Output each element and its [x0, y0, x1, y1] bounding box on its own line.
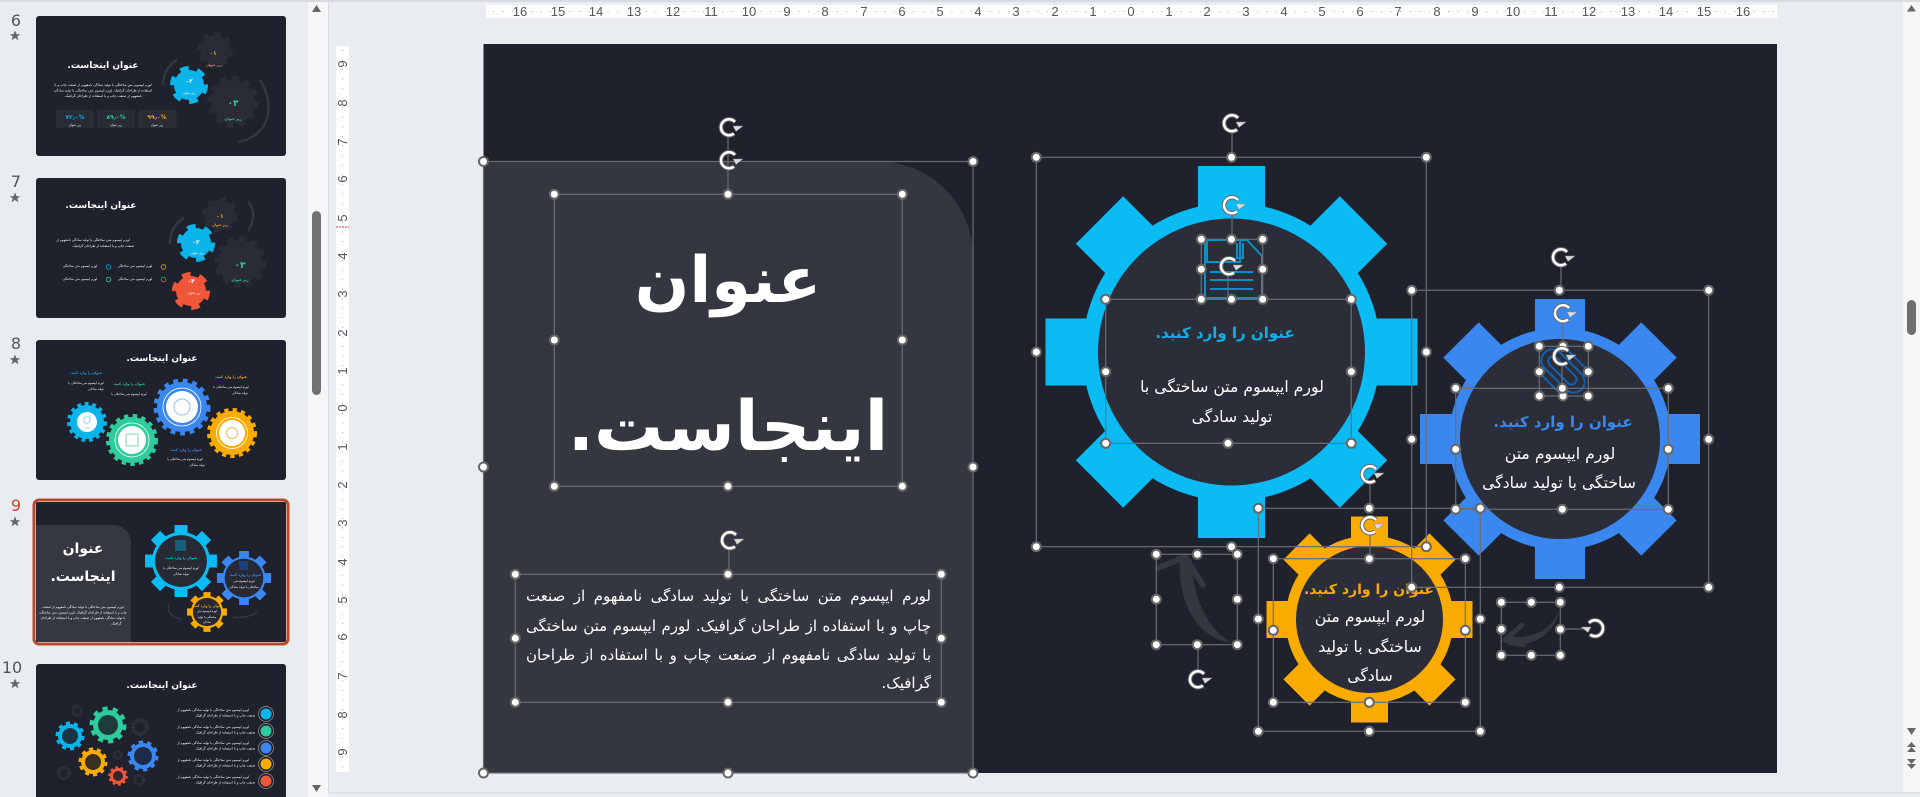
horizontal ruler: 16 [513, 4, 527, 19]
main scrollbar [1903, 2, 1920, 792]
thumbnail: slide 10: صنعت چاپ و با استفاده از طراحان گرافیک. [195, 780, 255, 784]
thumbnail: slide 8: لورم ایپسوم متن ساختگی با [167, 457, 203, 462]
thumbnail: slide 6: عنوان اینجاست. [67, 61, 139, 71]
thumbnail: slide 8: عنوان را وارد کنید. [215, 375, 248, 379]
thumbnail: slide 7: صنعت چاپ و با استفاده از طراحان گرافیک. [72, 243, 134, 248]
selection handles [479, 153, 1713, 778]
horizontal ruler: 6 [1356, 4, 1364, 19]
thumbnail: slide 10: صنعت چاپ و با استفاده از طراحان گرافیک. [195, 730, 255, 734]
thumbnail: slide 9, selected: لورم ایپسوم متن [233, 579, 255, 584]
thumbnail: slide 7: ۰۲ [192, 239, 200, 246]
body paragraph [526, 587, 932, 692]
thumbnail: slide 9, selected: اینجاست. [50, 569, 116, 585]
slide numbers and stars: 9 [11, 496, 21, 515]
horizontal ruler: 2 [1051, 4, 1059, 19]
horizontal ruler: 15 [551, 4, 565, 19]
thumbnail: slide 8: عنوان را وارد کنید. [70, 371, 103, 375]
thumbnail: slide 9, selected: عنوان [63, 541, 103, 557]
thumbnail: slide 9, selected: سادگی [203, 620, 212, 624]
title: عنوان [635, 244, 821, 318]
horizontal ruler: 14 [589, 4, 603, 19]
thumbnail: slide 7: عنوان اینجاست. [65, 201, 137, 211]
thumbnail: slide 10: لورم ایپسوم متن ساختگی با تولید سادگی نامفهوم از [176, 758, 249, 763]
horizontal ruler: 12 [1582, 4, 1596, 19]
vertical ruler: 8 [335, 99, 350, 107]
horizontal ruler: 16 [1736, 4, 1750, 19]
horizontal ruler: 2 [1203, 4, 1211, 19]
vertical ruler: 6 [335, 175, 350, 183]
thumbnail: slide 7: زیر عنوان [232, 278, 248, 282]
vertical ruler: 7 [335, 672, 350, 680]
thumbnail: slide 10: لورم ایپسوم متن ساختگی با تولید سادگی نامفهوم از [176, 775, 249, 780]
thumbnail: slide 9, selected: لورم ایپسوم متن [197, 609, 217, 614]
thumbnail: slide 9, selected [34, 500, 288, 644]
slide numbers and stars [2, 11, 22, 688]
horizontal ruler: 6 [898, 4, 906, 19]
text: blue gear: عنوان را وارد کنید. [1493, 413, 1633, 431]
horizontal ruler: 10 [1506, 4, 1520, 19]
vertical ruler: 5 [335, 214, 350, 222]
thumbnail: slide 9, selected: ساختگی با تولید سادگی [229, 585, 259, 589]
arrow: right curved [1505, 610, 1559, 645]
horizontal ruler: 15 [1697, 4, 1711, 19]
thumbnail: slide 6: ۰۲ [185, 78, 193, 85]
left text panel [484, 162, 973, 773]
thumbnail: slide 6: زیر عنوان [151, 123, 164, 127]
slide numbers and stars: 6 [11, 11, 21, 30]
gear: cyan [1046, 166, 1418, 538]
thumbnail: slide 9, selected: لورم ایپسوم متن ساختگی با تولید سادگی نامفهوم از صنعت [42, 605, 124, 610]
thumbnail: slide 8: لورم ایپسوم متن ساختگی با [213, 385, 249, 390]
thumbnail: slide 10: عنوان اینجاست. [126, 681, 198, 691]
thumbnail: slide 6: ۰۱ [209, 50, 217, 57]
thumbnail: slide 8: عنوان را وارد کنید. [170, 448, 203, 452]
horizontal ruler: 3 [1012, 4, 1020, 19]
horizontal ruler: 13 [1621, 4, 1635, 19]
horizontal ruler: 11 [1544, 4, 1558, 19]
vertical ruler: 8 [335, 711, 350, 719]
thumbnail: slide 10: لورم ایپسوم متن ساختگی با تولید سادگی نامفهوم از [176, 708, 249, 713]
vertical ruler: 2 [335, 481, 350, 489]
text: orange gear: لورم ایپسوم متن [1315, 607, 1425, 627]
vertical ruler [335, 46, 350, 772]
top edge line [0, 0, 1920, 2]
main slide background [484, 44, 1777, 773]
thumbnail: slide 7: ۰۳ [234, 261, 246, 271]
thumbnail: slide 10: صنعت چاپ و با استفاده از طراحان گرافیک. [195, 746, 255, 750]
body paragraph: گرافیک. [882, 674, 931, 692]
thumbnail: slide 8 [36, 340, 286, 480]
horizontal ruler: 8 [1433, 4, 1441, 19]
thumbnail: slide 7: لورم ایپسوم متن ساختگی [63, 277, 97, 282]
text: cyan gear: تولید سادگی [1192, 407, 1272, 427]
thumbnail: slide 10 [36, 664, 286, 797]
thumbnail: slide 9, selected: عنوان را وارد کنید. [229, 573, 262, 577]
vertical ruler: 5 [335, 596, 350, 604]
thumbnail: slide 9, selected: تولید سادگی [173, 572, 189, 576]
thumbnail: slide 9, selected: عنوان را وارد کنید. [192, 604, 222, 608]
horizontal ruler: 11 [704, 4, 718, 19]
vertical ruler: 0 [335, 404, 350, 412]
icon: paperclip [1532, 340, 1594, 402]
thumbnail: slide 7: زیر عنوان [191, 251, 204, 255]
thumbnail: slide 8: تولید سادگی [189, 463, 205, 467]
horizontal ruler: 9 [783, 4, 791, 19]
horizontal ruler: 8 [821, 4, 829, 19]
slide numbers and stars: 7 [11, 172, 21, 191]
horizontal ruler: 4 [974, 4, 982, 19]
thumbnail: slide 6: نامفهوم از صنعت چاپ و با استفاده از طراحان گرافیک. [64, 93, 142, 99]
vertical ruler: 9 [335, 748, 350, 756]
horizontal ruler: 7 [860, 4, 868, 19]
thumbnail: slide 7: لورم ایپسوم متن ساختگی [118, 264, 152, 269]
thumbnail: slide 7: زیر عنوان [212, 223, 228, 227]
slide numbers and stars: 10 [2, 658, 22, 677]
text: orange gear: ساختگی با تولید [1318, 637, 1422, 657]
thumbnail: slide 7: ۰۱ [216, 213, 224, 220]
thumbnail: slide 6: استفاده از طراحان گرافیک. لورم ایپسوم متن ساختگی با تولید سادگی [54, 88, 152, 94]
vertical ruler: 3 [335, 290, 350, 298]
thumbnail: slide 7: ۰۴ [187, 278, 195, 285]
thumbnail: slide 7: لورم ایپسوم متن ساختگی با تولید سادگی نامفهوم از [55, 237, 130, 243]
thumbnail: slide 6: زیر عنوان [206, 63, 222, 67]
vertical ruler: 2 [335, 329, 350, 337]
thumbnail: slide 7: زیر عنوان [188, 291, 201, 295]
slide numbers and stars: 8 [11, 334, 21, 353]
thumbnail: slide 6: ۰۳ [228, 99, 239, 109]
vertical ruler: 6 [335, 633, 350, 641]
thumbnail: slide 7 [36, 178, 286, 318]
vertical ruler: 3 [335, 519, 350, 527]
thumbnail: slide 8: عنوان اینجاست. [126, 354, 198, 364]
horizontal ruler: 0 [1127, 4, 1135, 19]
text: cyan gear: عنوان را وارد کنید. [1155, 324, 1295, 342]
horizontal ruler [486, 4, 1777, 19]
gear: orange [1266, 516, 1472, 722]
thumbnail: slide 9, selected: چاپ و با استفاده از طراحان گرافیک. لورم ایپسوم متن ساختگی [39, 610, 127, 616]
thumbnail: slide 8: تولید سادگی [232, 391, 248, 395]
text: orange gear: عنوان را وارد کنید. [1304, 582, 1434, 598]
horizontal ruler: 4 [1280, 4, 1288, 19]
thumbnail: slide 8: لورم ایپسوم متن ساختگی با [111, 392, 147, 397]
thumbnail: slide 8: تولید سادگی [88, 387, 104, 391]
body paragraph: لورم ایپسوم متن ساختگی با تولید سادگی نامفهوم از صنعت [526, 587, 931, 605]
vertical ruler: 4 [335, 558, 350, 566]
thumbnail: slide 10: صنعت چاپ و با استفاده از طراحان گرافیک. [195, 764, 255, 768]
body paragraph: با تولید سادگی نامفهوم از صنعت چاپ و با استفاده از طراحان [526, 646, 931, 664]
rotation handles [721, 115, 1603, 687]
horizontal ruler: 1 [1165, 4, 1173, 19]
gear: blue [1420, 299, 1700, 579]
vertical ruler: 7 [335, 138, 350, 146]
thumbnail: slide 6: ۷۲٫۰% [65, 114, 85, 121]
title: اینجاست. [568, 387, 888, 467]
text: blue gear: ساختگی با تولید سادگی [1482, 473, 1636, 493]
thumbnail: slide 7: لورم ایپسوم متن ساختگی [63, 264, 97, 269]
body paragraph: چاپ و با استفاده از طراحان گرافیک. لورم ایپسوم متن ساختگی [526, 617, 931, 635]
thumbnail: slide 9, selected: لورم ایپسوم متن ساختگی با [163, 566, 199, 571]
thumbnail: slide 6: زیر عنوان [183, 91, 196, 95]
vertical ruler: 1 [335, 367, 350, 375]
horizontal ruler: 14 [1659, 4, 1673, 19]
horizontal ruler: 7 [1394, 4, 1402, 19]
horizontal ruler: 5 [936, 4, 944, 19]
thumbnail: slide 7: لورم ایپسوم متن ساختگی [118, 277, 152, 282]
horizontal ruler: 9 [1471, 4, 1479, 19]
thumbnail: slide 6: ۹۹٫۰% [147, 114, 167, 121]
thumbnail: slide 9, selected: با تولید سادگی نامفهوم از صنعت چاپ و با استفاده از طراحان [41, 616, 125, 621]
horizontal ruler: 5 [1318, 4, 1326, 19]
horizontal ruler: 10 [742, 4, 756, 19]
selection boxes [484, 131, 1709, 773]
thumbnail: slide 8: عنوان را وارد کنید. [113, 382, 146, 386]
vertical ruler: 4 [335, 252, 350, 260]
text: blue gear [1482, 413, 1636, 493]
thumbnail: slide 10: لورم ایپسوم متن ساختگی با تولید سادگی نامفهوم از [176, 741, 249, 746]
vertical ruler: 9 [335, 60, 350, 68]
thumbnail: slide 6: زیر عنوان [110, 123, 123, 127]
text: orange gear: سادگی [1347, 666, 1393, 685]
thumbnail: slide 6 [36, 16, 286, 156]
text: blue gear: لورم ایپسوم متن [1505, 444, 1615, 464]
horizontal ruler: 13 [627, 4, 641, 19]
thumbnail: slide 9, selected: ساختگی با تولید [198, 615, 217, 619]
thumbnail: slide 6: زیر عنوان [69, 123, 82, 127]
thumbnail: slide 10: لورم ایپسوم متن ساختگی با تولید سادگی نامفهوم از [176, 725, 249, 730]
thumbnail: slide 6: زیر عنوان [225, 117, 241, 121]
text: cyan gear [1140, 324, 1324, 427]
vertical ruler: 1 [335, 443, 350, 451]
arrow: left curved [1158, 557, 1232, 643]
thumbnail: slide 9, selected: عنوان را وارد کنید. [165, 556, 198, 560]
thumbnail: slide 10: صنعت چاپ و با استفاده از طراحان گرافیک. [195, 714, 255, 718]
thumbnail: slide 6: ۸۹٫۰% [106, 114, 126, 121]
thumbnail: slide 6: لورم ایپسوم متن ساختگی با تولید سادگی نامفهوم از صنعت چاپ و با [54, 82, 152, 88]
text: orange gear [1304, 582, 1434, 685]
horizontal ruler: 3 [1242, 4, 1250, 19]
text: cyan gear: لورم ایپسوم متن ساختگی با [1140, 377, 1324, 397]
thumbnail: slide 9, selected: گرافیک. [111, 622, 122, 626]
thumbnail: slide 8: لورم ایپسوم متن ساختگی با [68, 381, 104, 386]
title [568, 244, 888, 467]
horizontal ruler: 12 [666, 4, 680, 19]
horizontal ruler: 1 [1089, 4, 1097, 19]
icon: floppy document [1205, 240, 1262, 298]
